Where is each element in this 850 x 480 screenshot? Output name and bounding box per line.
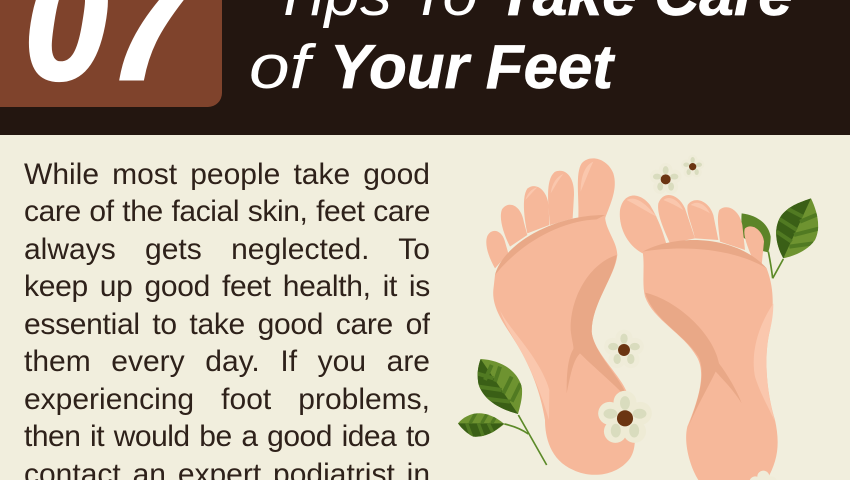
title: Your Feet xyxy=(330,33,615,102)
left foot xyxy=(486,158,635,475)
outer highlight xyxy=(754,303,775,422)
intro paragraph: them every day. If you are xyxy=(24,345,430,378)
leaf large xyxy=(776,198,818,258)
intro paragraph: experiencing foot problems, xyxy=(24,383,430,416)
number badge xyxy=(0,0,222,107)
intro paragraph: essential to take good care of xyxy=(24,308,430,341)
header text xyxy=(24,0,793,114)
sole xyxy=(643,240,778,480)
intro paragraph: always gets neglected. To xyxy=(24,233,430,266)
leaf small xyxy=(741,213,771,252)
toes xyxy=(620,195,764,265)
toe highlights xyxy=(525,162,593,200)
toes xyxy=(486,158,615,268)
intro paragraph: care of the facial skin, feet care xyxy=(24,195,430,228)
leaves right xyxy=(741,197,823,278)
illustration: feet with leaves and flowers xyxy=(458,157,818,480)
header band xyxy=(0,0,850,135)
outer highlight xyxy=(500,310,549,420)
ball crease xyxy=(643,240,767,268)
large flower xyxy=(598,391,652,443)
title: of xyxy=(249,33,317,102)
title xyxy=(249,0,793,102)
toe highlights xyxy=(627,198,710,217)
intro paragraph: then it would be a good idea to xyxy=(24,420,430,453)
leaf large xyxy=(478,359,522,414)
intro paragraph: keep up good feet health, it is xyxy=(24,270,430,303)
stems xyxy=(768,252,783,278)
intro paragraph xyxy=(24,158,430,480)
leaf small xyxy=(458,413,504,437)
sole xyxy=(493,215,635,475)
stems xyxy=(504,415,547,465)
middle flower xyxy=(604,330,644,368)
arch shadow xyxy=(567,255,627,398)
top flower two xyxy=(681,155,704,177)
right foot xyxy=(620,195,778,480)
top flower one xyxy=(650,163,682,194)
flowers xyxy=(598,155,777,480)
ball crease xyxy=(495,215,605,275)
bottom flower xyxy=(749,471,777,480)
leaves lower left xyxy=(457,357,547,465)
arch shadow xyxy=(645,293,742,429)
intro paragraph: While most people take good xyxy=(24,158,430,191)
